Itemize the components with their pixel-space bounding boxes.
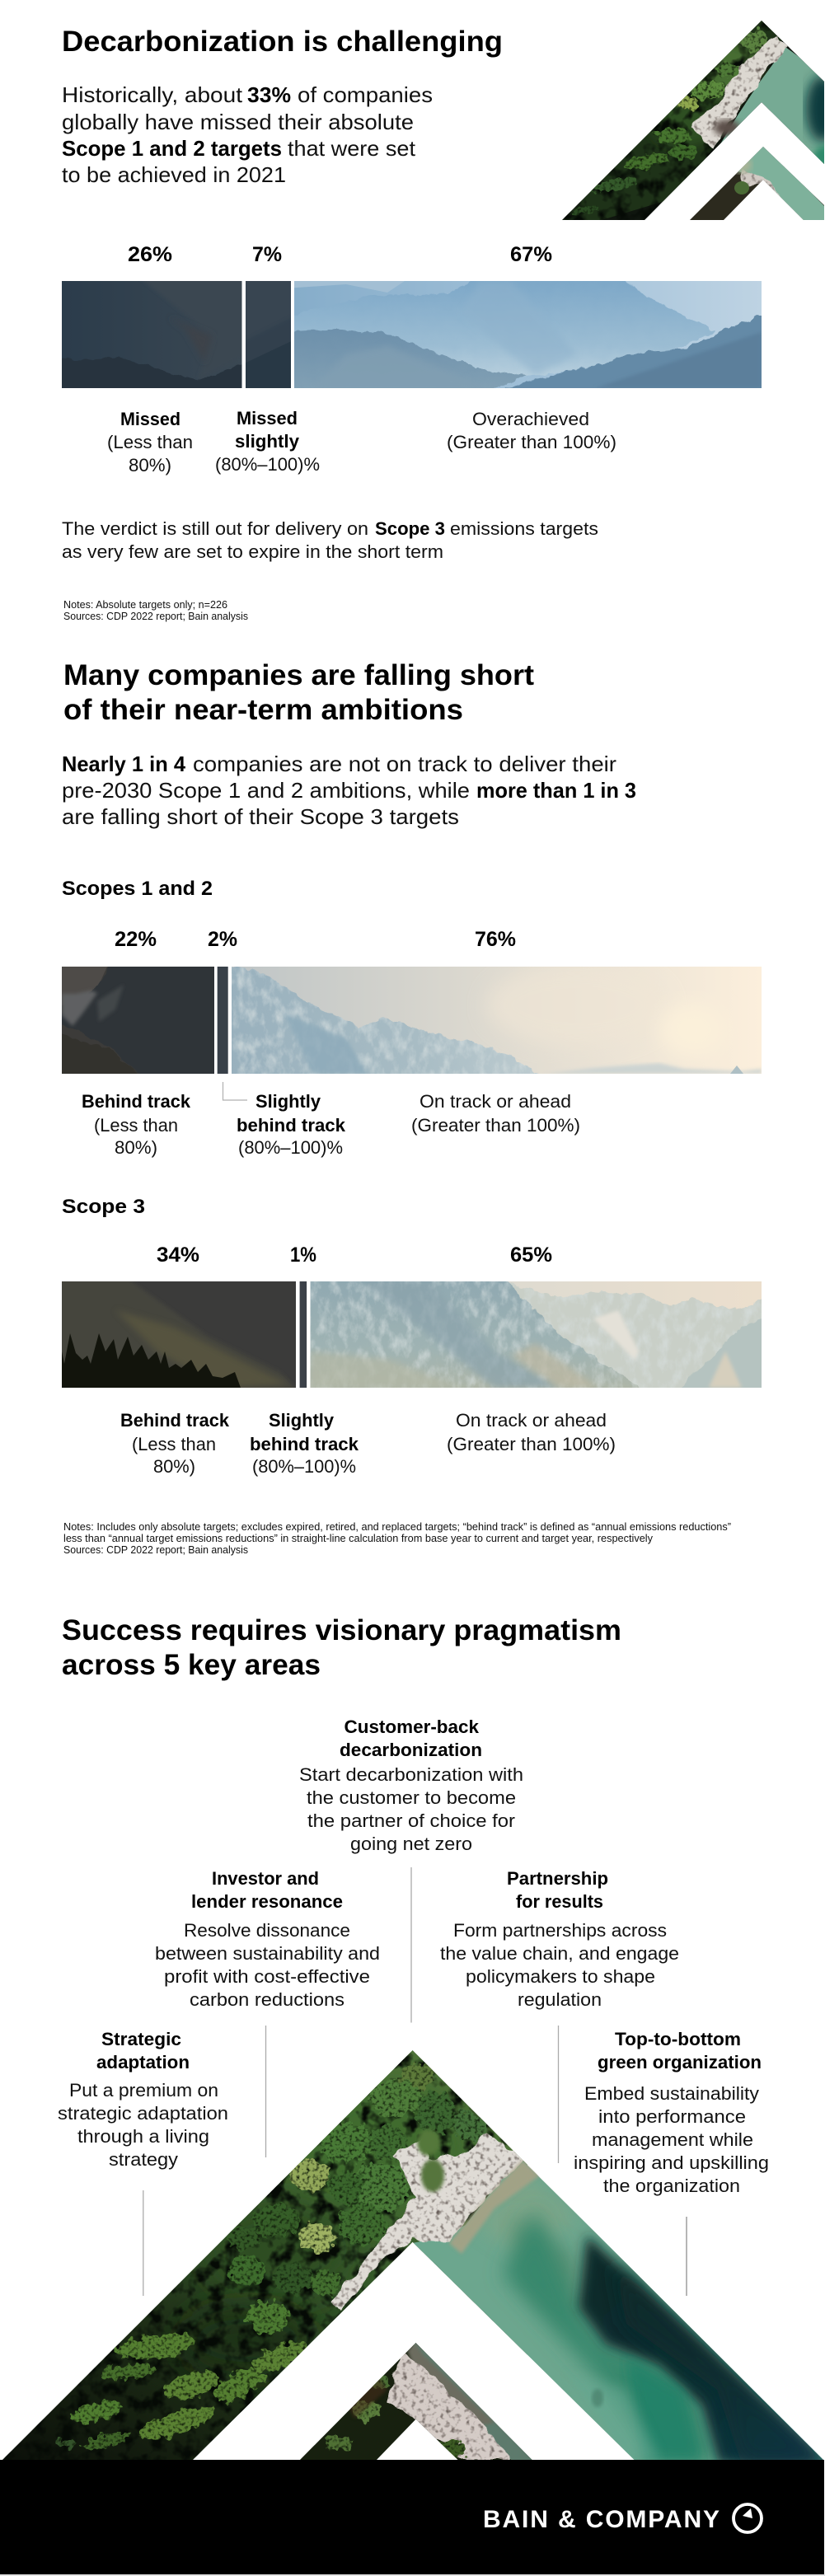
bar labels: scope 3 [120,1410,616,1477]
bar segment: overachieved 67% [294,281,762,388]
key area: strategic adaptation: Put a premium on [69,2080,218,2101]
panel: decarbonization is challenging [54,16,825,622]
bar labels: scopes 1 and 2: Behind track [82,1091,191,1112]
intro text block: of companies [298,82,433,107]
key area: strategic adaptation: strategic adaptation [58,2103,228,2124]
icon: bain logo circle [734,2504,762,2532]
percent labels: scope 3: 34% [157,1244,199,1267]
bar labels: 80%) [129,455,171,475]
notes: Sources: CDP 2022 report; Bain analysis [63,611,248,622]
key area: partnership for results: regulation [518,1989,602,2010]
bar labels: scopes 1 and 2: (Less than [94,1115,178,1136]
bar labels: Overachieved [472,409,589,429]
key area: investor and lender resonance: carbon reductions [190,1989,345,2010]
bar segment: slightly behind 2% [218,967,228,1074]
bar labels: scope 3: behind track [250,1434,359,1454]
bar labels: scopes 1 and 2 [82,1091,580,1158]
percent labels: 67% [510,243,552,266]
stacked bar chart: scopes 1 and 2 [62,967,762,1074]
key area: strategic adaptation [58,2029,228,2170]
bar labels: slightly [235,431,300,452]
illustration: large chevron photo mountain [0,2048,825,2464]
key area: strategic adaptation: strategy [109,2149,178,2170]
notes [63,1521,731,1556]
intro text block: Scope 1 and 2 targets [62,136,282,161]
heading [63,659,534,726]
bar labels: scope 3: On track or ahead [456,1410,607,1431]
subheading: scopes 1 and 2: Scopes 1 and 2 [62,878,213,900]
bar labels: scope 3: Behind track [120,1410,230,1431]
intro text block: 33% [247,82,291,107]
key area: top-to-bottom green organization: management while [592,2129,753,2150]
bar labels: scopes 1 and 2: behind track [237,1115,346,1136]
notes: Notes: Includes only absolute targets; excludes expired, retired, and replaced targets; “behind track” is defined as “annual emissions reductions” [63,1521,731,1533]
intro text block: pre-2030 Scope 1 and 2 ambitions, while [62,778,470,803]
percent labels [128,243,552,266]
icon: chevron photo mark, top right [560,16,825,222]
key area: top-to-bottom green organization: inspiring and upskilling [574,2152,769,2173]
notes: Notes: Absolute targets only; n=226 [63,599,227,611]
notes: Sources: CDP 2022 report; Bain analysis [63,1544,248,1556]
scope 3 verdict text: The verdict is still out for delivery on [62,518,368,539]
key area: partnership for results: policymakers to shape [466,1966,655,1987]
bar labels: scopes 1 and 2: (Greater than 100%) [411,1115,580,1136]
key area: customer-back decarbonization [299,1717,523,1854]
notes [63,599,248,622]
key area: customer-back decarbonization: going net zero [350,1834,472,1854]
key area: customer-back decarbonization: the customer to become [307,1787,516,1808]
key area: investor and lender resonance [155,1868,380,2010]
key area: investor and lender resonance: lender resonance [191,1891,343,1912]
key area: strategic adaptation: adaptation [96,2052,190,2073]
stacked bar chart: scope 3 [62,1281,762,1388]
title: Decarbonization is challenging [62,26,503,58]
connector: slightly behind track [223,1082,247,1100]
percent labels: scope 3 [157,1244,552,1267]
intro text block: globally have missed their absolute [62,110,414,134]
percent labels: scopes 1 and 2 [115,928,516,951]
panel: five key areas [0,1614,825,2464]
key area: partnership for results: Form partnerships across [453,1920,667,1941]
key area: partnership for results: Partnership [507,1868,608,1889]
bar segment: missed 26% [62,281,242,388]
key area: strategic adaptation: Strategic [101,2029,181,2049]
key area: customer-back decarbonization: the partner of choice for [307,1810,515,1831]
bar labels: scopes 1 and 2: (80%–100)% [238,1137,343,1158]
intro text block: more than 1 in 3 [476,778,636,803]
intro text block: that were set [288,136,416,161]
bar labels: scope 3: 80%) [153,1456,195,1477]
percent labels: scopes 1 and 2: 76% [475,928,516,951]
heading [62,1614,621,1681]
key area: customer-back decarbonization: Customer-back [345,1717,480,1737]
intro text block: are falling short of their Scope 3 targets [62,804,459,829]
bar labels: scope 3: Slightly [269,1410,335,1431]
key area: top-to-bottom green organization: Top-to-bottom [615,2029,741,2049]
key area: investor and lender resonance: Investor and [212,1868,319,1889]
bar segment: slightly behind 1% [300,1281,307,1388]
key area: investor and lender resonance: between sustainability and [155,1943,380,1964]
percent labels: scope 3: 1% [290,1244,316,1267]
percent labels: scope 3: 65% [510,1244,552,1267]
intro text block: Nearly 1 in 4 [62,752,186,776]
scope 3 verdict text: emissions targets [450,518,598,539]
key area: investor and lender resonance: Resolve dissonance [184,1920,350,1941]
key area: top-to-bottom green organization: into performance [598,2106,746,2127]
percent labels: 7% [252,243,282,266]
subheading: scope 3: Scope 3 [62,1196,145,1218]
intro text block: to be achieved in 2021 [62,162,286,187]
logo wordmark: BAIN & COMPANY [483,2506,720,2533]
intro text block: companies are not on track to deliver their [193,752,616,776]
heading: Success requires visionary pragmatism [62,1614,621,1646]
bar labels: scope 3: (Less than [132,1434,216,1454]
key area: investor and lender resonance: profit with cost-effective [164,1966,370,1987]
key area: partnership for results [440,1868,679,2010]
intro text block [62,752,636,829]
heading: of their near-term ambitions [63,694,463,726]
bar labels [107,408,616,475]
bar labels: scopes 1 and 2: 80%) [115,1137,157,1158]
key area: top-to-bottom green organization: green organization [598,2052,762,2073]
heading: Many companies are falling short [63,659,534,691]
key area: partnership for results: for results [516,1891,603,1912]
key area: top-to-bottom green organization: Embed sustainability [584,2083,759,2104]
stacked bar chart: target delivery [62,281,762,388]
percent labels: scopes 1 and 2: 2% [208,928,237,951]
key area: partnership for results: the value chain, and engage [440,1943,679,1964]
heading: across 5 key areas [62,1649,321,1681]
intro text block: Historically, about [62,82,243,107]
intro text block [62,82,433,187]
bar labels: Missed [237,408,298,429]
bar segment: missed slightly 7% [246,281,291,388]
bar labels: (80%–100)% [215,454,320,475]
leader lines [143,1867,687,2296]
percent labels: 26% [128,243,172,266]
bar segment: behind track 34% [62,1281,296,1388]
key area: customer-back decarbonization: Start decarbonization with [299,1764,523,1785]
bar labels: scope 3: (Greater than 100%) [447,1434,616,1454]
scope 3 verdict text: as very few are set to expire in the short term [62,541,443,562]
scope 3 verdict text [62,518,598,562]
bar segment: behind track 22% [62,967,214,1074]
key area: customer-back decarbonization: decarbonization [340,1740,482,1760]
bar labels: scopes 1 and 2: Slightly [255,1091,321,1112]
key area: strategic adaptation: through a living [77,2126,209,2147]
scope 3 verdict text: Scope 3 [375,518,445,539]
bar segment: on track 65% [310,1281,762,1388]
bar segment: on track 76% [224,964,762,1081]
bar labels: scope 3: (80%–100)% [252,1456,356,1477]
percent labels: scopes 1 and 2: 22% [115,928,157,951]
panel: near-term ambitions [54,659,766,1556]
key area: top-to-bottom green organization [574,2029,769,2196]
bar labels: (Greater than 100%) [447,432,616,452]
bar labels: (Less than [107,432,193,452]
notes: less than “annual target emissions reductions” in straight-line calculation from base year to current and target year, respectively [63,1533,654,1544]
footer band [0,2460,825,2576]
bar labels: scopes 1 and 2: On track or ahead [420,1091,571,1112]
key area: top-to-bottom green organization: the organization [603,2176,740,2196]
bar labels: Missed [120,409,180,429]
